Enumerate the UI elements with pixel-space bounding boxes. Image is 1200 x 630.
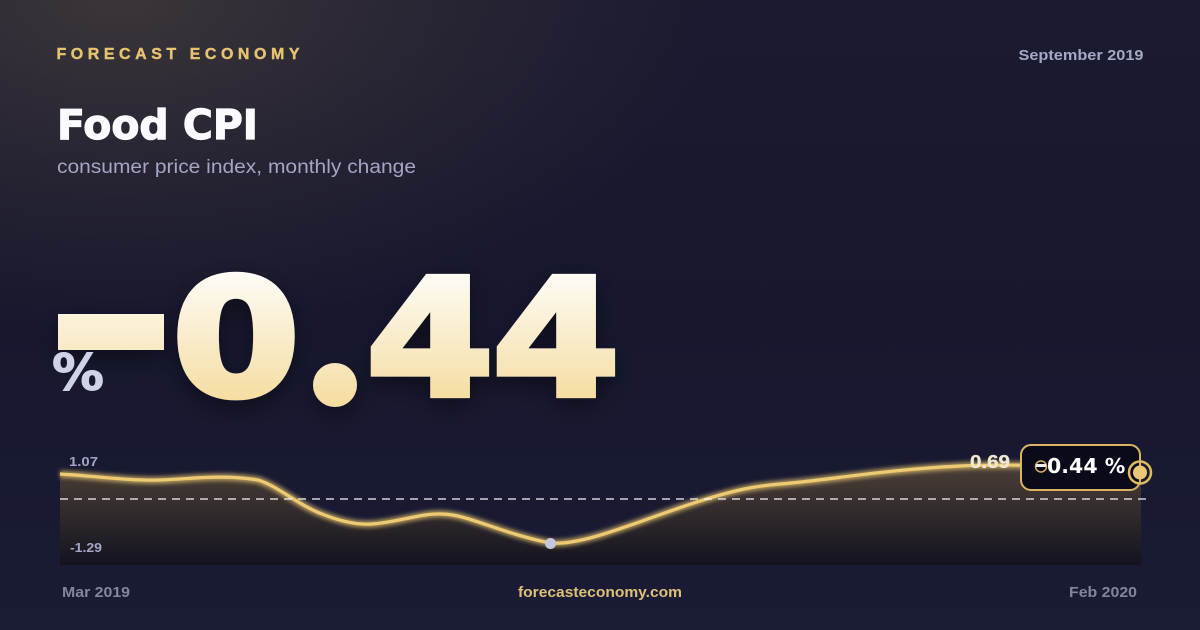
area fill <box>60 465 1141 565</box>
previous value label: 0.69 <box>970 452 1010 472</box>
end date: Feb 2020 <box>1069 584 1137 601</box>
max value label: 1.07 <box>69 454 98 469</box>
title: Food CPI <box>57 101 258 149</box>
decimal point <box>313 363 357 407</box>
zero baseline <box>60 498 1146 500</box>
subtitle: consumer price index, monthly change <box>57 157 416 178</box>
callout text: 0.44 % <box>1047 454 1125 478</box>
callout: current value <box>1021 445 1140 490</box>
trend line <box>60 465 1140 543</box>
date: September 2019 <box>1018 47 1144 64</box>
minus sign glyph <box>58 314 164 350</box>
end marker <box>1129 462 1151 484</box>
start date: Mar 2019 <box>62 584 130 601</box>
digit 4: 4 <box>492 245 620 433</box>
digit 0: 0 <box>172 245 300 433</box>
min value label: -1.29 <box>70 540 102 555</box>
big value <box>58 245 620 433</box>
line glow <box>60 465 1140 543</box>
minimum marker <box>545 538 556 549</box>
percent sign: % <box>52 344 104 402</box>
callout minus badge <box>1036 461 1046 472</box>
website: forecasteconomy.com <box>518 584 682 601</box>
brand label: FORECAST ECONOMY <box>56 46 300 63</box>
digit 4: 4 <box>366 245 494 433</box>
sparkline chart <box>60 452 1146 565</box>
callout box <box>1021 445 1140 490</box>
